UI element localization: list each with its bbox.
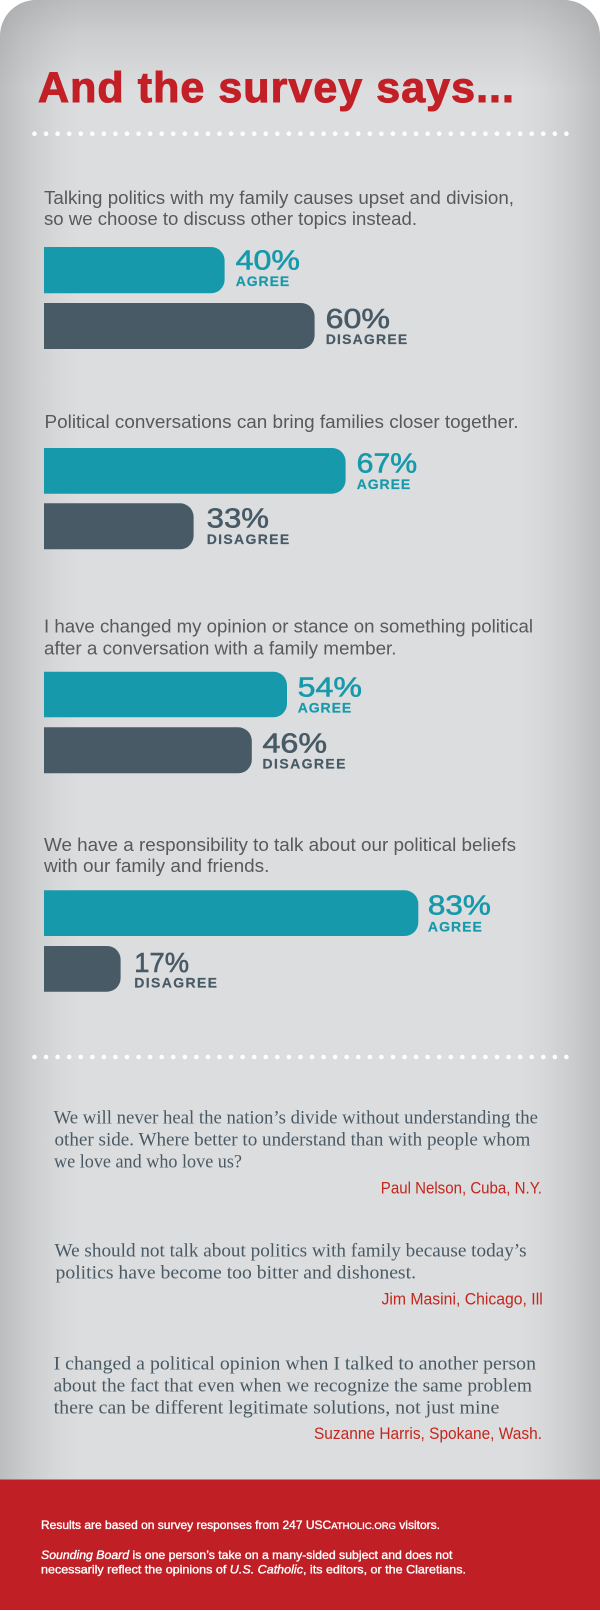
value: 17% disagree	[134, 947, 217, 990]
value: 33% disagree: 33%	[207, 503, 269, 534]
question text 2: Political conversations can bring families closer together.	[44, 411, 518, 432]
survey question 4	[43, 834, 516, 992]
survey question 3	[44, 615, 533, 773]
bar: agree 40%	[44, 247, 225, 293]
value: 60% disagree: DISAGREE	[326, 331, 407, 347]
value: 17% disagree: 17%	[134, 947, 189, 978]
value: 67% agree: AGREE	[357, 476, 410, 492]
value: 46% disagree: 46%	[262, 728, 327, 759]
value: 54% agree	[298, 671, 362, 715]
bar: agree 54%	[44, 672, 287, 717]
value: 40% agree: 40%	[236, 244, 300, 275]
bar: disagree 17%	[44, 946, 121, 992]
question text 1: so we choose to discuss other topics instead.	[44, 208, 417, 229]
reader quote 3: there can be different legitimate solutions, not just mine	[54, 1399, 499, 1419]
reader quote 3: about the fact that even when we recognize the same problem	[54, 1377, 533, 1397]
value: 83% agree	[428, 889, 491, 934]
value: 46% disagree	[262, 728, 346, 772]
reader quote 1	[54, 1108, 542, 1197]
value: 67% agree	[357, 447, 417, 492]
question text 1: Talking politics with my family causes upset and division,	[44, 187, 514, 208]
panel: red footer	[0, 1480, 600, 1610]
value: 40% agree	[236, 244, 300, 289]
value: 54% agree: 54%	[298, 671, 362, 702]
value: 60% disagree	[326, 303, 407, 347]
bar: disagree 60%	[44, 303, 315, 349]
reader quote 3	[54, 1355, 542, 1443]
value: 40% agree: AGREE	[236, 273, 289, 289]
question text 3: after a conversation with a family member.	[44, 637, 396, 658]
reader quote 2: politics have become too bitter and dishonest.	[56, 1264, 416, 1284]
reader quote 2: We should not talk about politics with family because today’s	[54, 1242, 527, 1262]
bar: disagree 46%	[44, 727, 252, 773]
reader quote 1: We will never heal the nation’s divide without understanding the	[54, 1108, 538, 1128]
survey question 2	[44, 411, 518, 549]
footer text	[41, 1518, 466, 1577]
footer text: Results are based on survey responses from 247 USCATHOLIC.ORG visitors.	[41, 1518, 440, 1532]
reader quote 2	[54, 1242, 543, 1308]
value: 60% disagree: 60%	[326, 303, 390, 334]
value: 46% disagree: DISAGREE	[262, 756, 346, 772]
value: 83% agree: AGREE	[428, 918, 482, 934]
footer text: necessarily reflect the opinions of U.S. Catholic , its editors, or the Claretians.	[41, 1563, 466, 1577]
bar: agree 67%	[44, 448, 346, 494]
reader quote 1: other side. Where better to understand than with people whom	[54, 1130, 531, 1150]
question text 4: We have a responsibility to talk about our political beliefs	[44, 834, 516, 855]
value: 83% agree: 83%	[428, 889, 491, 920]
reader quote 1: we love and who love us?	[54, 1152, 242, 1172]
value: 67% agree: 67%	[357, 447, 417, 478]
question text 4: with our family and friends.	[43, 855, 269, 876]
reader quote 3: I changed a political opinion when I talked to another person	[54, 1355, 536, 1375]
attribution 1: Paul Nelson, Cuba, N.Y.	[381, 1179, 542, 1197]
attribution 3: Suzanne Harris, Spokane, Wash.	[314, 1425, 542, 1443]
value: 33% disagree: DISAGREE	[207, 531, 289, 547]
attribution 2: Jim Masini, Chicago, Ill	[382, 1290, 543, 1308]
value: 54% agree: AGREE	[298, 699, 351, 715]
bar: agree 83%	[44, 890, 418, 936]
title: And the survey says...	[38, 64, 514, 112]
footer text: Sounding Board is one person’s take on a many-sided subject and does not	[41, 1548, 453, 1562]
survey question 1	[44, 187, 514, 349]
question text 3: I have changed my opinion or stance on something political	[44, 615, 533, 636]
value: 33% disagree	[207, 503, 289, 547]
value: 17% disagree: DISAGREE	[134, 974, 217, 990]
bar: disagree 33%	[44, 503, 194, 549]
